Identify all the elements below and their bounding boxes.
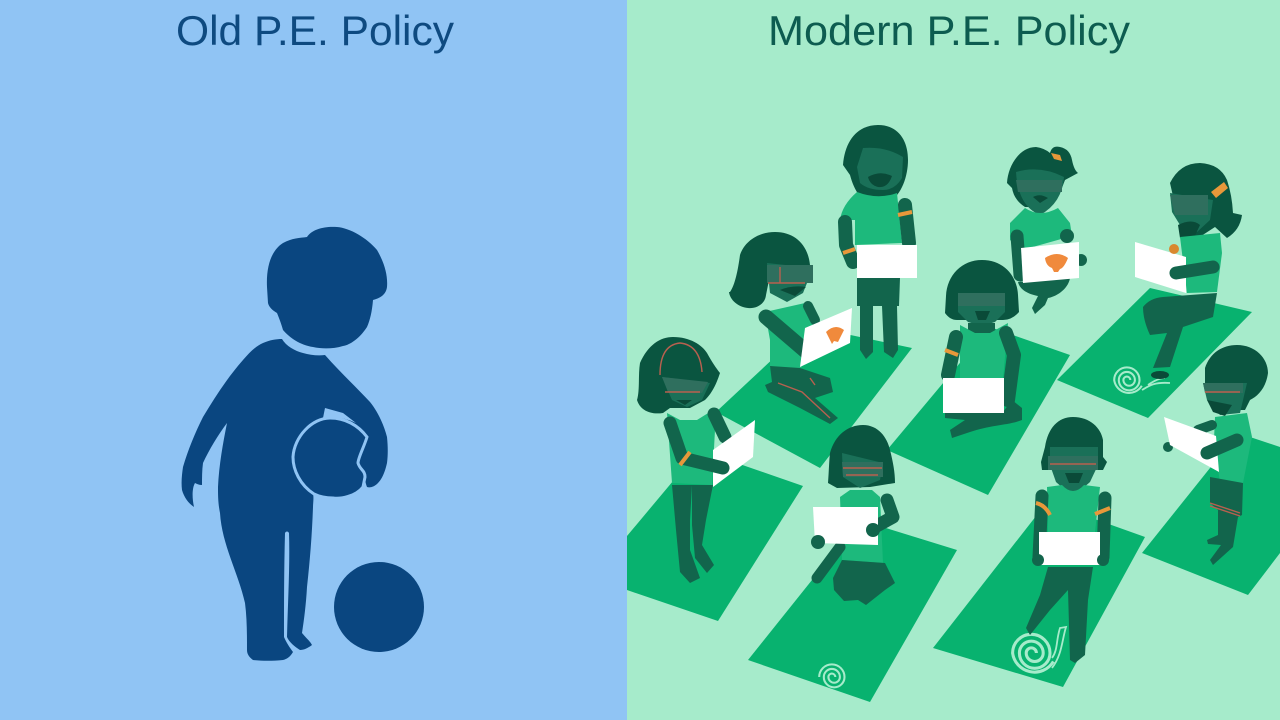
mat spirals bbox=[819, 367, 1170, 687]
heading: old policy: Old P.E. Policy bbox=[176, 7, 454, 54]
child head bbox=[267, 227, 387, 348]
panel: modern policy bbox=[627, 0, 1280, 720]
student: standing right bbox=[1163, 345, 1268, 565]
icon: child with balls bbox=[182, 227, 424, 661]
floor ball bbox=[334, 562, 424, 652]
student: seated centre bbox=[943, 260, 1022, 438]
arm gap bbox=[323, 408, 356, 423]
heading: modern policy: Modern P.E. Policy bbox=[768, 7, 1130, 54]
student: kneeling front centre bbox=[811, 425, 895, 605]
student: seated right rear bbox=[1135, 163, 1242, 379]
held ball bbox=[293, 418, 367, 498]
student: seated top right centre bbox=[1007, 147, 1087, 314]
student: standing back centre bbox=[840, 125, 917, 359]
student: seated left rear bbox=[729, 232, 852, 424]
child body bbox=[182, 339, 388, 661]
panel: old policy bbox=[0, 0, 627, 720]
student: standing left bbox=[637, 337, 755, 583]
exercise mats bbox=[627, 288, 1280, 702]
student: standing front bbox=[1026, 417, 1110, 663]
